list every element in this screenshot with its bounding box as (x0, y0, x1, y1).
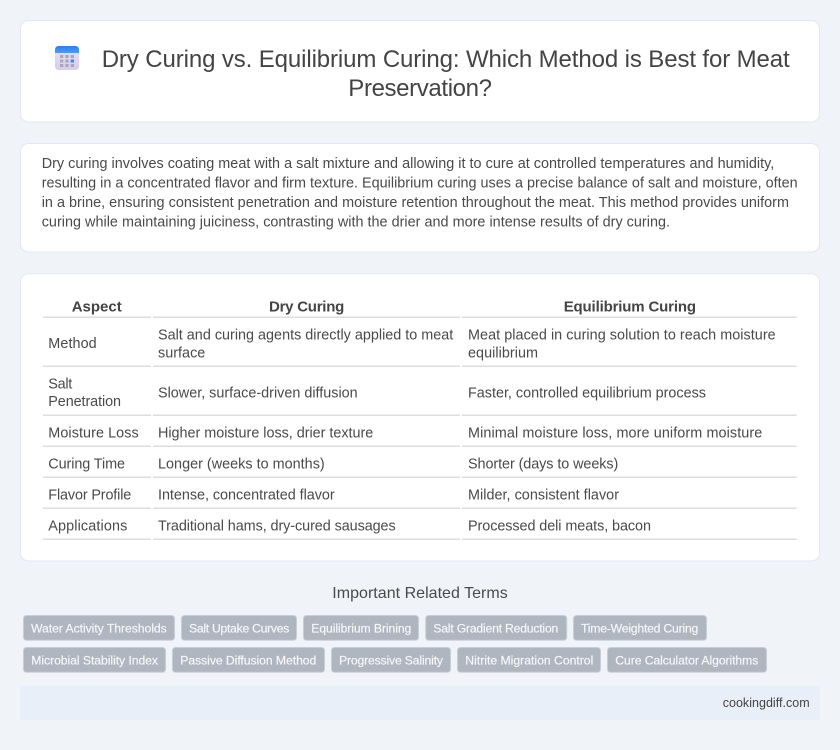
table row: method: surface (158, 345, 205, 361)
table row: moisture loss (43, 425, 797, 447)
related terms tags: Water Activity Thresholds (31, 621, 167, 635)
table row: curing time (43, 456, 797, 478)
table row: method: Meat placed in curing solution to reach moisture (468, 327, 776, 343)
table row: method: Salt and curing agents directly applied to meat (158, 327, 453, 343)
table row: salt penetration: Faster, controlled equilibrium process (468, 385, 706, 401)
related terms tags: Nitrite Migration Control (465, 654, 593, 668)
heading: important related terms: Important Related Terms (332, 585, 508, 602)
table row: flavor profile (43, 487, 797, 509)
related terms tags: Microbial Stability Index (31, 654, 158, 668)
text block: introduction paragraph: in a brine, ensuring consistent penetration and moisture retention throughout the meat. This method provides uniform (42, 195, 789, 211)
title: Dry Curing vs. Equilibrium Curing: Which Method is Best for Meat (102, 46, 790, 73)
text block: introduction paragraph (42, 156, 798, 230)
table row: moisture loss: Moisture Loss (48, 425, 139, 441)
panel: comparison table (20, 274, 820, 561)
table row: moisture loss: Higher moisture loss, drier texture (158, 425, 373, 441)
table row: curing time: Longer (weeks to months) (158, 456, 325, 472)
table row: method: Method (48, 336, 97, 352)
table row: curing time: Shorter (days to weeks) (468, 456, 618, 472)
panel: introduction (20, 144, 820, 252)
table row: salt penetration: Salt (48, 376, 72, 392)
table row: method: equilibrium (468, 345, 538, 361)
table row: salt penetration: Slower, surface-driven diffusion (158, 385, 358, 401)
related terms tags: Equilibrium Brining (311, 621, 411, 635)
table row: curing time: Curing Time (48, 456, 125, 472)
related terms tags: Cure Calculator Algorithms (615, 654, 758, 668)
table row: flavor profile: Intense, concentrated flavor (158, 487, 335, 503)
table row: applications: Applications (48, 518, 127, 534)
table row: salt penetration (43, 376, 797, 416)
table row: applications: Traditional hams, dry-cured sausages (158, 518, 396, 534)
related terms tags: Passive Diffusion Method (180, 654, 316, 668)
table row: salt penetration: Penetration (48, 394, 121, 410)
table row: applications: Processed deli meats, bacon (468, 518, 651, 534)
text block: introduction paragraph: curing while maintaining juiciness, contrasting with the drier and more intense results of dry curing. (42, 214, 670, 230)
table row: method (43, 327, 797, 367)
related terms tags: Time-Weighted Curing (581, 621, 698, 635)
panel: header (20, 20, 820, 122)
table row: flavor profile: Flavor Profile (48, 487, 131, 503)
text block: introduction paragraph: Dry curing involves coating meat with a salt mixture and allowing it to cure at controlled temperatures and humidity, (42, 156, 774, 172)
related terms tags: Salt Uptake Curves (189, 621, 289, 635)
table row: moisture loss: Minimal moisture loss, more uniform moisture (468, 425, 762, 441)
table row: flavor profile: Milder, consistent flavor (468, 487, 619, 503)
icon: calendar (55, 46, 79, 70)
table header row: Equilibrium Curing (564, 299, 696, 316)
table header row: Dry Curing (269, 299, 344, 316)
table header row (43, 299, 797, 318)
table header row: Aspect (72, 299, 122, 316)
footer (20, 686, 820, 720)
title (102, 46, 790, 102)
related terms tags: Progressive Salinity (339, 654, 444, 668)
related terms tags: Salt Gradient Reduction (433, 621, 558, 635)
text block: introduction paragraph: resulting in a concentrated flavor and firm texture. Equilibrium curing uses a precise balance of salt and moisture, often (42, 175, 798, 191)
footer: cookingdiff.com (723, 696, 810, 710)
table row: applications (43, 518, 797, 540)
related terms tags (24, 616, 766, 672)
title: Preservation? (348, 75, 492, 102)
